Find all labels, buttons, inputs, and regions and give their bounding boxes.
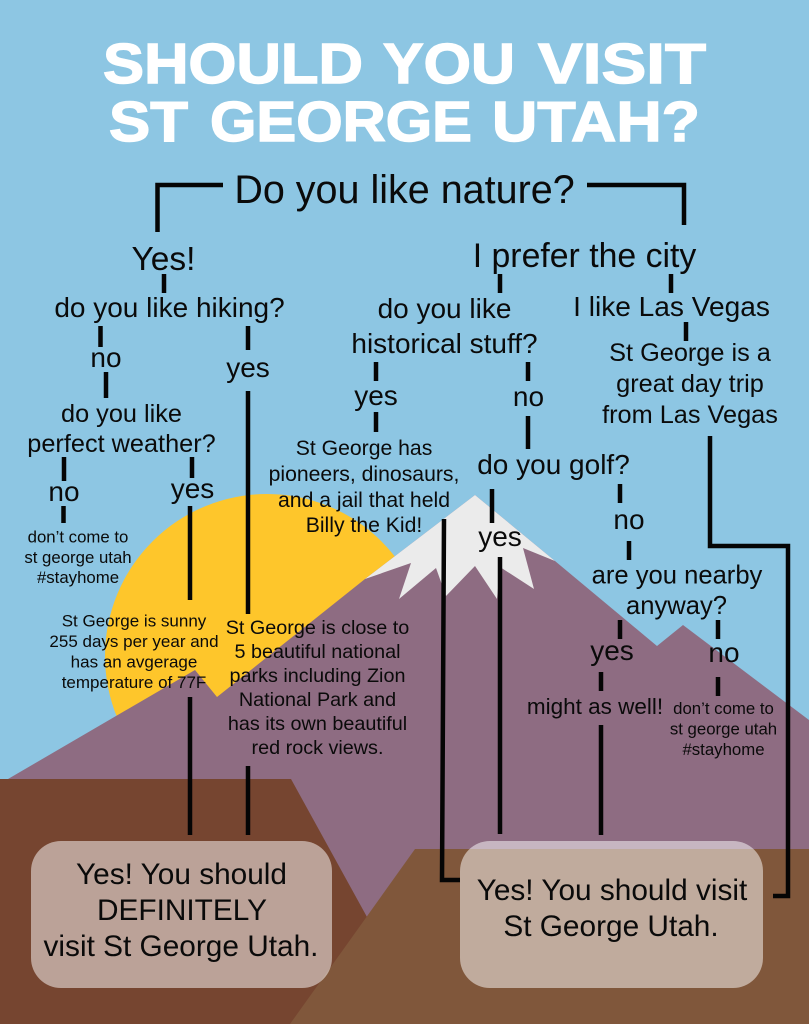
text: history fact: pioneers, dinosaurs, <box>269 463 459 486</box>
answer: prefer the city: I prefer the city <box>473 237 696 275</box>
result box: definitely visit: visit St George Utah. <box>44 930 318 963</box>
outcome: do not come (right) <box>670 699 777 759</box>
text: national parks fact: has its own beautiful <box>228 713 407 735</box>
outcome: do not come (left): #stayhome <box>37 568 119 587</box>
right ground cliff <box>290 849 809 1024</box>
text: national parks fact: parks including Zion <box>230 665 405 687</box>
text: day trip from Las Vegas: great day trip <box>616 370 764 398</box>
answer: no to nearby: no <box>708 637 740 668</box>
text: history fact: Billy the Kid! <box>306 514 422 537</box>
text: sunny weather fact: has an avgerage <box>71 652 197 672</box>
title: VISIT <box>538 32 706 96</box>
result box: definitely visit <box>31 841 332 988</box>
answer: no to hiking: no <box>90 342 122 373</box>
text: history fact <box>269 437 459 537</box>
text: history fact: and a jail that held <box>278 489 450 512</box>
flowchart connector lines <box>64 185 788 896</box>
answer: yes to hiking: yes <box>226 352 270 383</box>
text: national parks fact: red rock views. <box>252 737 383 759</box>
mountain <box>0 495 809 1024</box>
title: YOU <box>383 32 515 96</box>
question: golf: do you golf? <box>477 449 630 480</box>
text: national parks fact: 5 beautiful national <box>234 641 401 663</box>
question: historical stuff: do you like <box>378 293 511 324</box>
question: historical stuff: historical stuff? <box>351 328 538 359</box>
text: sunny weather fact: St George is sunny <box>62 612 207 630</box>
outcome: do not come (right): #stayhome <box>682 740 765 759</box>
text: history fact: St George has <box>296 437 432 460</box>
text: sunny weather fact: temperature of 77F <box>62 673 206 692</box>
text: sunny weather fact <box>49 612 219 692</box>
text: day trip from Las Vegas <box>602 339 778 429</box>
outcome: do not come (right): don’t come to <box>673 699 774 718</box>
outcome: do not come (left): don’t come to <box>28 528 128 546</box>
answer: yes: Yes! <box>132 241 195 278</box>
mountain snow cap <box>365 495 555 599</box>
outcome: do not come (left) <box>24 528 132 587</box>
question: nearby anyway: are you nearby <box>592 562 763 590</box>
title: GEORGE <box>210 90 472 154</box>
answer: no to history: no <box>513 381 544 412</box>
question: perfect weather <box>27 400 216 458</box>
question: nearby anyway <box>592 562 763 620</box>
answer: like Las Vegas: I like Las Vegas <box>573 291 770 322</box>
result box: visit: Yes! You should visit <box>477 874 748 907</box>
result box: definitely visit: Yes! You should <box>76 858 287 891</box>
text: day trip from Las Vegas: from Las Vegas <box>602 401 778 429</box>
icon: sun <box>105 494 429 818</box>
answer: yes to golf: yes <box>478 521 522 552</box>
text: national parks fact: St George is close to <box>226 617 409 639</box>
answer: no to weather: no <box>48 476 80 507</box>
answer: yes to weather: yes <box>171 473 214 504</box>
illustration: desert landscape background <box>0 494 809 1024</box>
title: UTAH? <box>492 90 700 154</box>
outcome: do not come (left): st george utah <box>24 548 132 567</box>
outcome: might as well: might as well! <box>527 694 663 719</box>
question: hiking: do you like hiking? <box>54 292 285 323</box>
result box: visit <box>460 841 763 988</box>
outcome: do not come (right): st george utah <box>670 720 777 738</box>
left ground cliff <box>0 779 367 1024</box>
title: SHOULD <box>103 32 363 96</box>
question: nearby anyway: anyway? <box>626 592 727 620</box>
text: national parks fact: National Park and <box>239 689 396 711</box>
answer: yes to history: yes <box>354 380 398 411</box>
question: perfect weather: perfect weather? <box>27 430 216 458</box>
text: day trip from Las Vegas: St George is a <box>609 339 772 367</box>
result box: visit: St George Utah. <box>503 910 719 943</box>
question: historical stuff <box>351 293 538 359</box>
answer: no to golf: no <box>613 504 645 535</box>
title <box>103 32 706 154</box>
question: perfect weather: do you like <box>61 400 182 428</box>
answer: yes to nearby: yes <box>590 635 634 666</box>
title: ST <box>109 90 188 154</box>
text: sunny weather fact: 255 days per year and <box>49 632 219 651</box>
text: national parks fact <box>226 617 409 759</box>
result box: definitely visit: DEFINITELY <box>97 894 267 927</box>
question: do you like nature: Do you like nature? <box>234 168 575 212</box>
